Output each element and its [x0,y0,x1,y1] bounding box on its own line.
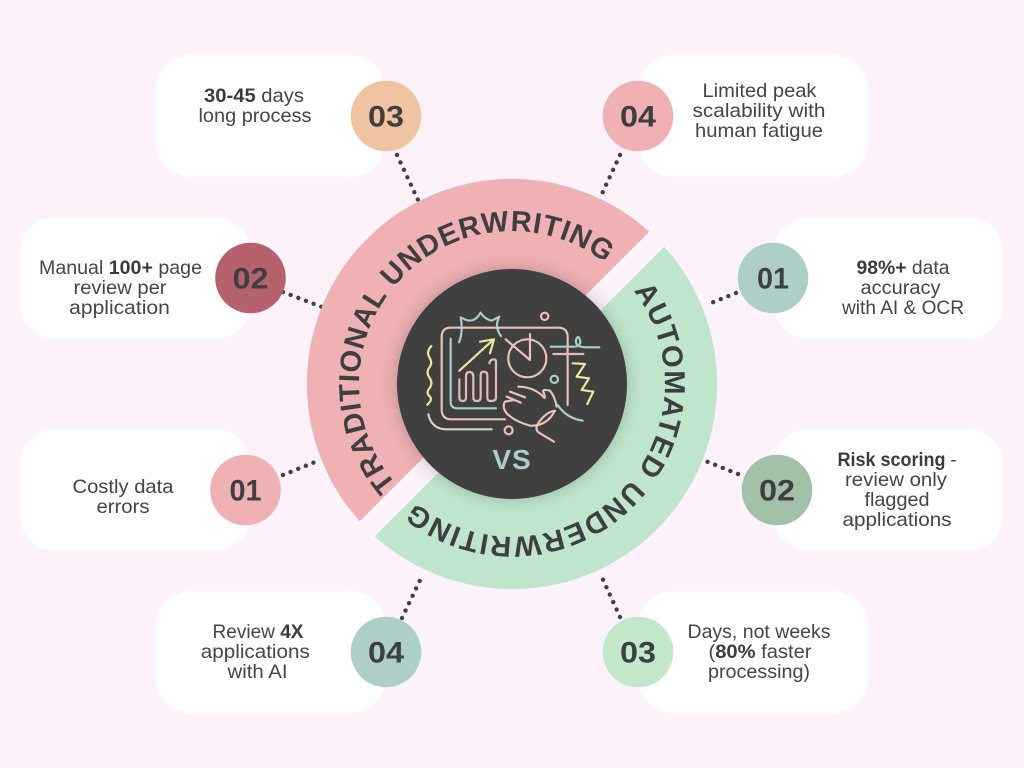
text: data accuracy [841,257,964,319]
text: faster processing: processing) [708,661,810,683]
text: manual review: review per [74,277,167,299]
label: VS: VS [492,444,532,475]
text: data accuracy: with AI & OCR [841,297,964,319]
green arc [375,247,717,589]
text: risk scoring: applications [842,509,952,531]
badge 01 [738,243,808,313]
text: process length: 30-45 days [204,85,304,107]
text: data accuracy: accuracy [860,277,941,299]
panel: traditional 04 [156,591,421,713]
badge 03: 03 [368,100,404,134]
badge 04 [351,617,421,687]
text: limited scalability [692,80,826,142]
text: process length [198,85,312,127]
text: risk scoring: review only [845,469,947,491]
panel: automated 02 [742,429,1003,551]
text: data errors: errors [96,496,150,518]
connector: automated 04 [600,155,620,198]
badge 04 [603,81,673,151]
badge 02: 02 [232,262,268,296]
badge 03: 03 [620,636,656,670]
badge 02 [215,243,286,313]
panel: automated 03 [603,591,868,713]
text: review applications: applications [201,641,310,663]
panel: traditional ring segment [306,178,650,522]
dark circle [397,269,627,499]
connector: automated 02 [703,460,738,474]
text: review applications: with AI [226,661,288,683]
pink arc [307,179,649,521]
text: data errors: Costly data [72,476,174,498]
text: limited scalability: Limited peak [702,80,817,102]
text: risk scoring: Risk scoring - [838,449,956,471]
text: data accuracy: 98%+ data [856,257,950,279]
center badge [397,269,627,499]
icon: dashboard with hand [427,313,599,442]
text: risk scoring [838,449,956,531]
panel: automated 04 [603,55,868,177]
text: process length: long process [198,105,312,127]
connector: automated 01 [706,293,736,305]
badge 01: 01 [757,262,789,296]
panel: automated ring segment [374,246,718,590]
badge 01 [210,455,281,525]
connector: traditional 01 [283,460,320,475]
text: risk scoring: flagged [864,489,930,511]
text: manual review: Manual 100+ page [39,257,202,279]
badge 03 [603,617,673,687]
text: faster processing [688,621,831,683]
panel: traditional 01 [20,429,281,551]
badge 01: 01 [230,474,262,508]
panel: automated 01 [738,217,1003,339]
text: limited scalability: human fatigue [695,120,823,142]
badge 02 [742,455,812,525]
panel: traditional 02 [20,217,286,339]
panel: traditional 03 [156,55,421,177]
text: faster processing: Days, not weeks [688,621,831,643]
heading: traditional underwriting: TRADITIONAL UNDERWRITING [339,210,612,496]
text: manual review: application [69,297,170,319]
badge 04: 04 [368,636,404,670]
text: data errors [72,476,174,518]
badge 02: 02 [759,474,795,508]
connector: automated 03 [600,573,620,617]
text: review applications [201,621,310,683]
heading: automated underwriting: AUTOMATED UNDERWRITING [408,286,685,557]
text: limited scalability: scalability with [692,100,826,122]
connector: traditional 03 [397,155,418,200]
badge 03 [351,81,421,151]
text: faster processing: (80% faster [708,641,812,663]
badge 04: 04 [620,100,656,134]
connector: traditional 02 [283,292,322,307]
connector: traditional 04 [402,574,423,618]
text: manual review [39,257,202,319]
text: review applications: Review 4X [212,621,303,643]
